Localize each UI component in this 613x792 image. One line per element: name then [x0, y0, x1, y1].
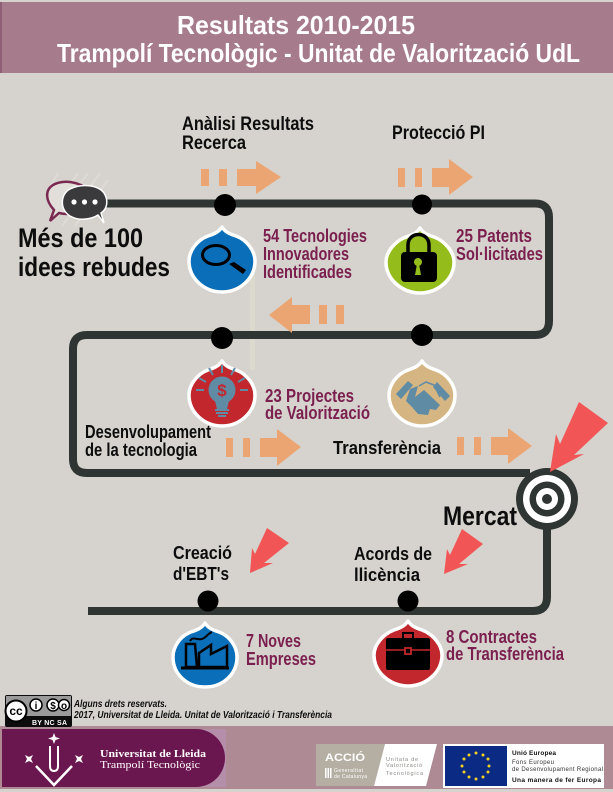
icon: factory drop [173, 623, 237, 687]
stat: 23 projectes: de Valorització [265, 403, 370, 423]
university logo panel: Universitat de Lleida [100, 749, 207, 760]
stat: 23 projectes [265, 386, 370, 423]
timeline path [73, 204, 549, 611]
label: creació EBT: d'EBT's [173, 564, 229, 584]
university logo panel [2, 729, 226, 787]
heading: idees rebudes [18, 223, 170, 282]
stat: 54 tecnologies: 54 Tecnologies [263, 226, 367, 246]
copyright text: Alguns drets reservats. [73, 698, 167, 710]
heading: idees rebudes: Més de 100 [18, 223, 143, 253]
arrow: red big [550, 402, 608, 472]
stat: 8 contractes [446, 627, 565, 664]
ACCIÓ logo: Generalitat [334, 768, 364, 774]
EU logo: de Desenvolupament Regional [512, 767, 603, 773]
icon: creative commons badge [5, 695, 72, 727]
icon: lightbulb drop [189, 361, 255, 426]
label: acords de llicència: Acords de [354, 544, 432, 564]
stat: 7 noves empreses [246, 631, 316, 669]
icon: creative commons badge: $ [50, 701, 56, 712]
icon: padlock drop [386, 228, 454, 293]
stat: 25 patents [456, 226, 543, 264]
arrow: red llicència [444, 529, 483, 574]
icon: creative commons badge: BY NC SA [32, 720, 67, 727]
stat: 54 tecnologies [263, 226, 367, 282]
arrow: protection [398, 159, 473, 195]
icon: magnifier drop [189, 227, 255, 292]
arrow: red EBT [250, 528, 289, 573]
stat: 23 projectes: 23 Projectes [265, 386, 354, 406]
EU logo [443, 744, 604, 788]
copyright text: 2017, Universitat de Lleida. Unitat de Valorització i Transferència [73, 709, 332, 721]
copyright text [73, 698, 332, 721]
ACCIÓ logo: ACCIÓ [325, 751, 365, 764]
ACCIÓ logo: de Catalunya [334, 774, 367, 780]
label: Anàlisi Resultats Recerca: Recerca [182, 133, 246, 154]
stat: 7 noves empreses: 7 Noves [246, 631, 301, 651]
label: desenvolupament [85, 422, 211, 460]
label: transferència: Transferència [333, 438, 442, 458]
label: Anàlisi Resultats Recerca: Anàlisi Resultats [182, 114, 314, 135]
heading: idees rebudes: idees rebudes [18, 252, 170, 282]
stat: 54 tecnologies: Innovadores [263, 244, 349, 264]
label: mercat: Mercat [443, 501, 517, 531]
milestone dots [198, 194, 433, 612]
icon: creative commons badge: i [35, 701, 38, 712]
label: desenvolupament: de la tecnologia [85, 440, 198, 460]
arrow: transfer [457, 428, 532, 464]
label: Protecció PI: Protecció PI [392, 123, 485, 144]
EU logo: Una manera de fer Europa [512, 777, 601, 784]
label: creació EBT: Creació [173, 543, 232, 563]
label: acords de llicència: llicència [354, 565, 421, 585]
icon: handshake drop [389, 361, 455, 426]
stat: 54 tecnologies: Identificades [263, 262, 352, 282]
title [57, 10, 580, 68]
icon: speech bubbles [47, 182, 107, 223]
title: Resultats 2010-2015 [177, 10, 415, 40]
header band [0, 2, 613, 73]
stat: 8 contractes: de Transferència [446, 644, 565, 664]
EU logo: Unió Europea [512, 750, 556, 757]
icon: briefcase drop [374, 621, 442, 686]
stat: 25 patents: 25 Patents [456, 226, 532, 246]
stat: 7 noves empreses: Empreses [246, 649, 316, 669]
label: creació EBT [173, 543, 232, 584]
icon: lightbulb drop: $ [217, 381, 227, 400]
stat: 25 patents: Sol·licitades [456, 244, 543, 264]
arrow: return left [269, 297, 344, 333]
icon: creative commons badge: o [61, 701, 67, 712]
EU logo: Fons Europeu [512, 760, 554, 766]
label: acords de llicència [354, 544, 432, 585]
university logo panel: Trampolí Tecnològic [100, 760, 200, 771]
arrow: analysis [201, 161, 281, 194]
ACCIÓ logo: Valorització [386, 763, 422, 769]
footer band [0, 726, 613, 789]
stat: 8 contractes: 8 Contractes [446, 627, 537, 647]
arrow: development [226, 429, 301, 466]
ACCIÓ logo: Tecnològica [386, 771, 424, 777]
label: desenvolupament: Desenvolupament [85, 422, 211, 442]
ACCIÓ logo: Unitata de [386, 757, 418, 763]
label: Anàlisi Resultats Recerca [182, 114, 314, 154]
icon: target [516, 468, 578, 530]
ACCIÓ logo [316, 744, 437, 786]
icon: creative commons badge: cc [9, 704, 23, 718]
